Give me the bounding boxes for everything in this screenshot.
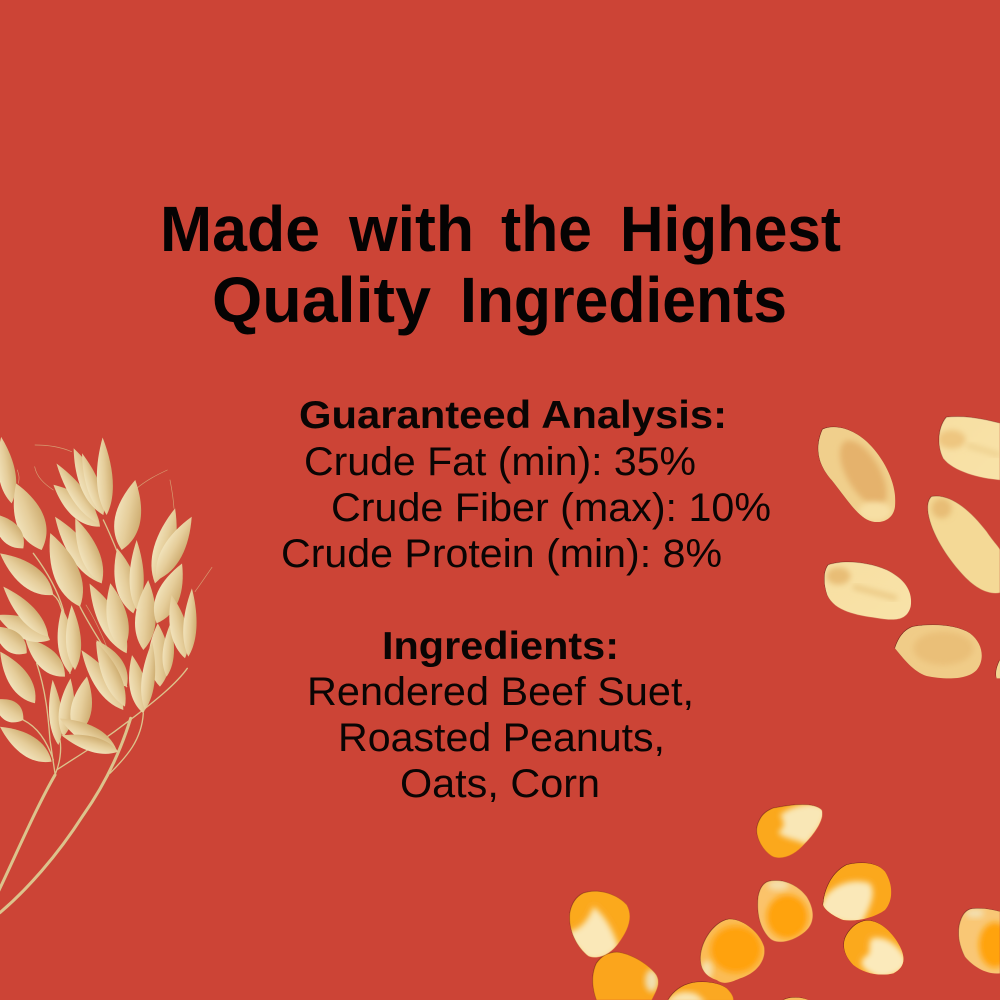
illustration: peanuts [810, 413, 1000, 682]
kernel 4 [844, 920, 904, 975]
peanut 1 [818, 426, 896, 522]
title: Ingredients [460, 264, 787, 336]
illustration: oat sprig [0, 436, 212, 913]
kernel 3 [822, 862, 892, 920]
text block: guaranteed analysis: Guaranteed Analysis: [299, 394, 727, 437]
kernel 7 [590, 950, 662, 1000]
text block: guaranteed analysis: Crude Fiber (max): 10% [331, 486, 771, 530]
peanut 2 [938, 416, 1000, 480]
text block: ingredients [307, 625, 694, 806]
kernel 5 [700, 918, 764, 983]
text block: ingredients: Ingredients: [382, 625, 619, 668]
text block: ingredients: Rendered Beef Suet, [307, 670, 694, 714]
kernel 9 [783, 997, 808, 1000]
illustration: corn kernels [567, 800, 1000, 1000]
text block: guaranteed analysis [281, 394, 771, 576]
text block: guaranteed analysis: Crude Fat (min): 35% [304, 440, 696, 484]
title [160, 193, 841, 336]
title: Made [160, 193, 320, 265]
title: Highest [620, 193, 841, 265]
title: Quality [212, 264, 431, 336]
title: the [501, 193, 592, 265]
peanut 3 [925, 492, 1000, 597]
kernel 8 [668, 982, 734, 1000]
text block: ingredients: Oats, Corn [400, 762, 600, 806]
text block: ingredients: Roasted Peanuts, [338, 716, 665, 760]
kernel 2 [757, 880, 813, 942]
kernel 10 [958, 908, 1000, 974]
peanut 6 [996, 660, 1000, 678]
kernel 1 [756, 804, 822, 858]
kernel 6 [569, 890, 630, 958]
peanut 5 [894, 624, 982, 678]
title: with [348, 193, 474, 265]
peanut 4 [824, 562, 912, 620]
text block: guaranteed analysis: Crude Protein (min): 8% [281, 532, 722, 576]
